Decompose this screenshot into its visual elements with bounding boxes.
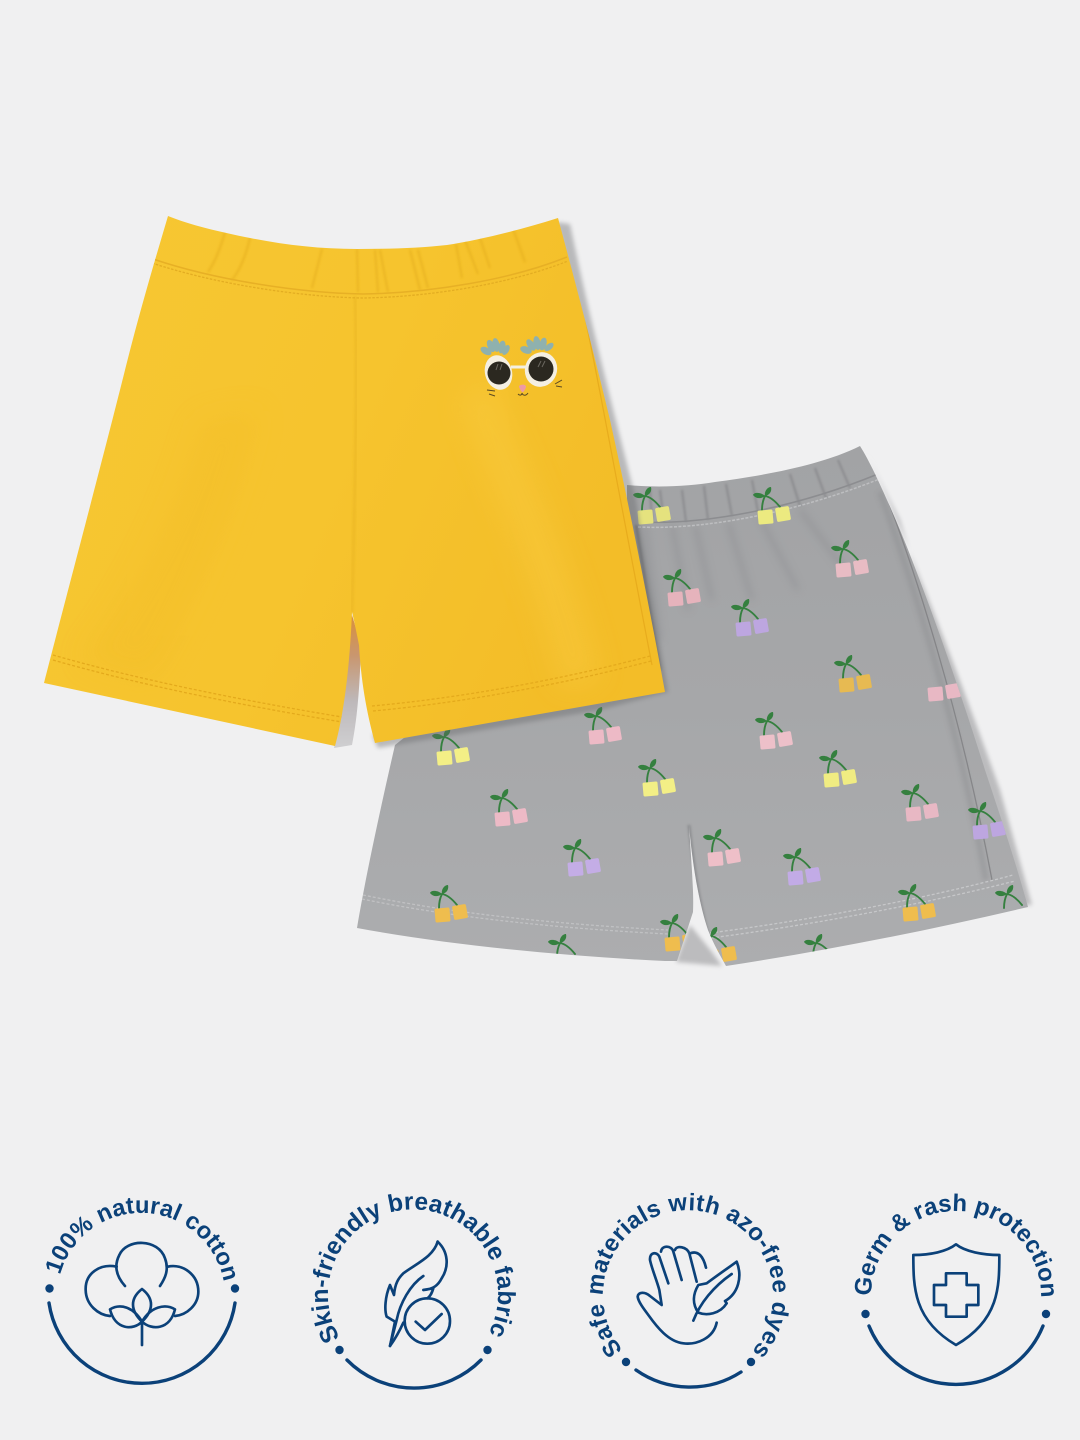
lenses bbox=[488, 362, 510, 384]
badge: germ and rash protection bbox=[854, 1194, 1054, 1386]
grey shorts body bbox=[357, 446, 1028, 966]
badge dots bbox=[861, 1310, 1050, 1318]
crotch gap shadow bbox=[334, 615, 361, 748]
badge dots bbox=[45, 1284, 239, 1293]
grey shorts folds and stitching bbox=[362, 460, 1022, 965]
grey shorts bbox=[357, 446, 1032, 966]
badge: 100% natural cotton bbox=[45, 1198, 240, 1385]
yellow shorts body bbox=[44, 216, 665, 746]
sunglasses cat print bbox=[479, 335, 562, 396]
badge arc bbox=[869, 1326, 1043, 1384]
icon: cotton boll bbox=[86, 1243, 198, 1345]
cherry print bbox=[430, 487, 1022, 965]
badge dots bbox=[335, 1346, 492, 1354]
badge text: Germ & rash protection bbox=[854, 1194, 1054, 1296]
icon: hand with feather bbox=[638, 1247, 739, 1344]
glasses rims bbox=[481, 348, 562, 393]
yellow shorts shadow bbox=[372, 222, 668, 748]
pineapple leaves bbox=[479, 335, 555, 357]
badge: safe materials with azo-free dyes bbox=[589, 1192, 789, 1389]
icon: shield with cross bbox=[913, 1244, 999, 1345]
badge arc bbox=[347, 1360, 481, 1388]
cat nose and whiskers bbox=[519, 385, 526, 392]
badge text: Skin-friendly breathable fabric bbox=[311, 1194, 516, 1343]
yellow shorts bbox=[44, 216, 668, 748]
badge arc bbox=[636, 1370, 741, 1387]
grey shorts shadow bbox=[676, 452, 1032, 966]
icon: feather with check bbox=[385, 1242, 450, 1346]
badge text: Safe materials with azo-free dyes bbox=[589, 1192, 789, 1357]
badge: skin-friendly breathable fabric bbox=[311, 1194, 516, 1390]
badge arc bbox=[49, 1303, 235, 1383]
badge dots bbox=[622, 1358, 755, 1366]
glasses bridge bbox=[511, 366, 526, 368]
yellow shorts folds and stitching bbox=[53, 226, 652, 722]
lens highlights bbox=[496, 361, 545, 370]
badge text: 100% natural cotton bbox=[46, 1198, 236, 1280]
